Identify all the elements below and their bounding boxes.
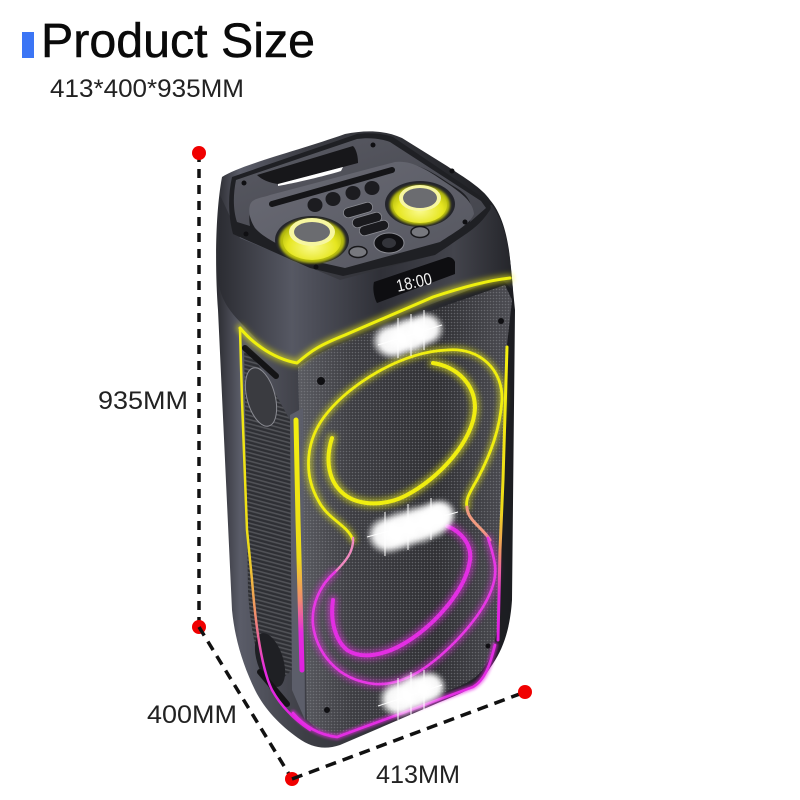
title block	[22, 15, 315, 68]
grille front panel	[298, 285, 512, 737]
peach transition curves	[335, 507, 490, 572]
LED clock display: 18:00	[394, 269, 434, 296]
small round buttons	[349, 226, 429, 258]
title: Product Size	[41, 15, 315, 68]
side grille panel	[244, 345, 292, 690]
lid rim	[229, 133, 491, 276]
left knob	[275, 216, 349, 264]
magenta bottom edge	[293, 645, 495, 737]
title marker	[22, 32, 34, 58]
middle sparkle	[366, 498, 458, 556]
yellow top edge glow	[240, 278, 510, 363]
control plate	[249, 162, 474, 268]
carry handle opening	[257, 146, 358, 186]
lid surface	[234, 138, 486, 226]
yellow figure-eight outer ring	[309, 350, 502, 540]
side lower bass port	[249, 629, 291, 704]
top sparkle	[371, 310, 445, 360]
LED clock display	[373, 257, 455, 303]
magenta inner arc	[332, 526, 470, 655]
magenta figure-eight outer ring	[313, 538, 495, 684]
center joystick button	[374, 233, 404, 253]
screws	[242, 142, 504, 713]
side upper bass port	[240, 348, 282, 430]
subtitle dimensions: 413*400*935MM	[50, 75, 244, 103]
top shoulder	[218, 195, 513, 362]
top slot	[272, 170, 392, 204]
depth dimension line	[199, 627, 299, 786]
rotary buttons	[308, 181, 380, 212]
pill buttons	[342, 201, 390, 237]
height label: 935MM	[98, 387, 188, 415]
side panel inner pillar	[290, 408, 305, 720]
right knob	[385, 181, 455, 227]
depth label: 400MM	[147, 701, 237, 729]
speaker product illustration	[216, 131, 515, 748]
height dimension line	[192, 146, 206, 634]
bottom sparkle	[378, 670, 447, 720]
side LED strips	[240, 328, 507, 730]
width label: 413MM	[376, 761, 460, 789]
speaker body	[216, 131, 515, 748]
yellow inner arc	[328, 363, 475, 503]
width dimension line	[292, 685, 532, 779]
